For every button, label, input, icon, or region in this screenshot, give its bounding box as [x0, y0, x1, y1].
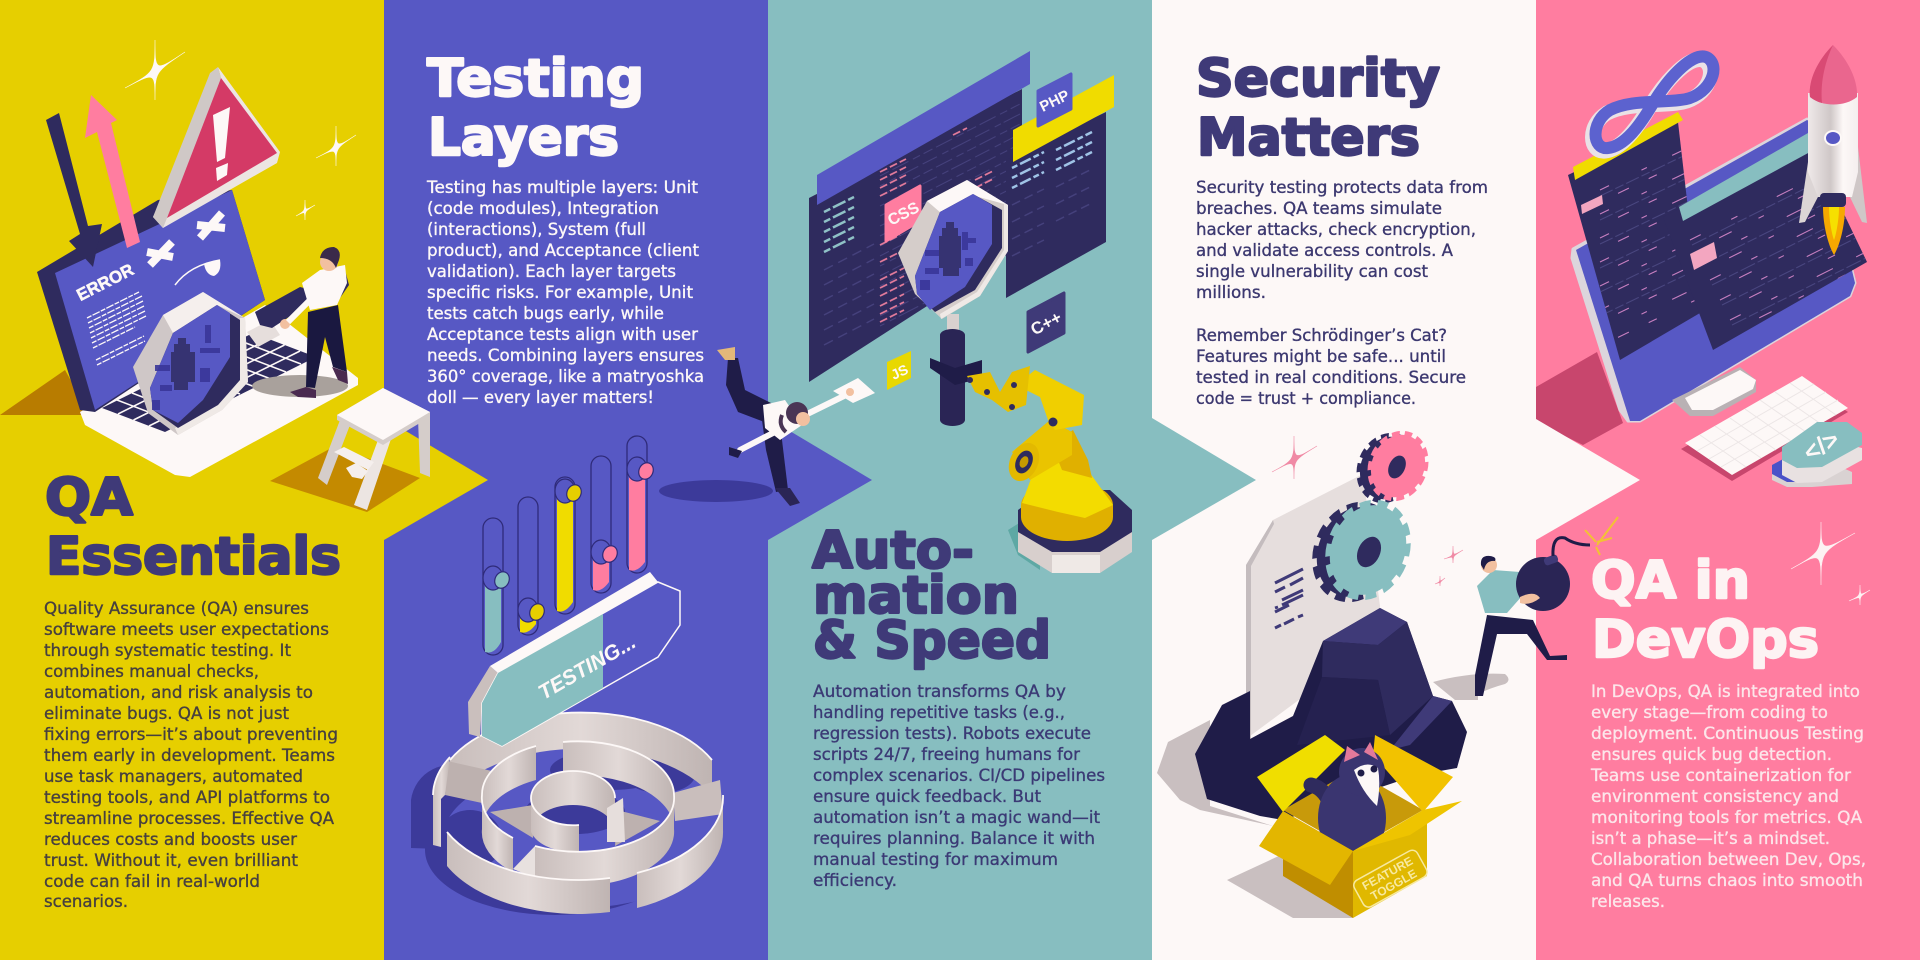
icon: keyboard	[1681, 376, 1848, 481]
badge: JS: JS	[888, 361, 911, 383]
icon: robot arm	[967, 366, 1132, 573]
icon: rocket	[1799, 45, 1867, 255]
panel: Automation and Speed	[768, 0, 1256, 960]
text: Testing body: Testing has multiple layers: Unit	[426, 178, 698, 198]
icon: person pushing magnifier	[252, 247, 349, 398]
icon: warning triangle	[153, 67, 280, 228]
heading: Automation and Speed: mation	[813, 566, 1019, 626]
code window left	[1568, 112, 1700, 360]
icon: sparkles	[125, 40, 356, 220]
icon: document card	[1246, 474, 1380, 739]
badge: CSS	[885, 186, 922, 241]
text: Testing body: (interactions), System (full	[427, 220, 646, 240]
text: Testing body: needs. Combining layers ensures	[427, 346, 704, 366]
text: QA Essentials body: eliminate bugs. QA is not just	[44, 704, 289, 724]
text: Automation body: efficiency.	[813, 871, 897, 891]
badge: PHP	[1037, 74, 1072, 126]
text: QA Essentials body: scenarios.	[44, 892, 128, 912]
text: Testing body: doll — every layer matters!	[427, 388, 654, 408]
text: QA Essentials body: Quality Assurance (QA) ensures	[44, 599, 309, 619]
slider 5	[627, 436, 656, 573]
slider 1	[483, 518, 512, 655]
text: QA Essentials body: streamline processes. Effective QA	[44, 809, 334, 829]
icon: woman delivering paper	[659, 347, 875, 506]
text: Security body: hacker attacks, check encryption,	[1196, 220, 1476, 240]
text: QA Essentials body: combines manual checks,	[44, 662, 259, 682]
panel: Security Matters	[1152, 0, 1640, 960]
arrow: purple pointer	[768, 418, 872, 540]
text: QA in DevOps body: Collaboration between Dev, Ops,	[1591, 850, 1866, 870]
text: QA in DevOps body: and QA turns chaos into smooth	[1591, 871, 1863, 891]
text: Automation body	[813, 682, 1105, 891]
heading: QA in DevOps: DevOps	[1592, 610, 1819, 670]
text: QA Essentials body: reduces costs and boosts user	[44, 830, 297, 850]
arrow: yellow pointer	[384, 418, 488, 540]
text: QA Essentials body: fixing errors—it’s about preventing	[44, 725, 338, 745]
badge: C++	[1028, 293, 1065, 352]
text: QA in DevOps body: Teams use containerization for	[1590, 766, 1851, 786]
text: Security body: and validate access controls. A	[1196, 241, 1453, 261]
text: QA Essentials body: trust. Without it, even brilliant	[44, 851, 298, 871]
badge: PHP: PHP	[1037, 87, 1072, 116]
text: Security body: single vulnerability can cost	[1196, 262, 1428, 282]
text: Testing body: product), and Acceptance (client	[427, 241, 699, 261]
heading: Automation and Speed: Auto-	[812, 521, 974, 581]
arrow: pink up	[85, 95, 140, 248]
icon: gears	[1301, 425, 1435, 611]
icon: box with cat: TOGGLE	[1368, 866, 1419, 903]
icon: cat	[1311, 742, 1386, 862]
icon: maze	[411, 713, 723, 915]
text: QA Essentials body: through systematic testing. It	[44, 641, 291, 661]
heading: Testing Layers: Layers	[428, 108, 619, 168]
text: Automation body: regression tests). Robots execute	[813, 724, 1091, 744]
text: QA in DevOps body: isn’t a phase—it’s a mindset.	[1591, 829, 1830, 849]
text: Testing body: Acceptance tests align with user	[427, 325, 698, 345]
icon: magnifier with bug	[133, 287, 315, 435]
heading: QA Essentials: Essentials	[46, 527, 341, 587]
text: QA Essentials body: testing tools, and API platforms to	[44, 788, 330, 808]
text: QA Essentials body: automation, and risk analysis to	[44, 683, 313, 703]
text: Security body: millions.	[1196, 283, 1266, 303]
text: Security body: Security testing protects data from	[1196, 178, 1488, 198]
slider 4	[591, 456, 620, 593]
icon: stool	[270, 388, 430, 512]
arrow: teal pointer	[1152, 418, 1256, 540]
text: QA in DevOps body: environment consistency and	[1591, 787, 1839, 807]
text: Automation body: Automation transforms QA by	[813, 682, 1066, 702]
text: Automation body: requires planning. Balance it with	[813, 829, 1095, 849]
text: QA in DevOps body: monitoring tools for metrics. QA	[1591, 808, 1862, 828]
text: QA in DevOps body: ensures quick bug detection.	[1591, 745, 1832, 765]
icon: rock	[1195, 608, 1467, 820]
heading: QA in DevOps	[1591, 551, 1819, 670]
heading: QA Essentials: QA	[45, 468, 133, 528]
code window main	[809, 51, 1030, 382]
icon: laptop: ERROR	[74, 260, 137, 305]
arrow: white pointer	[1536, 419, 1640, 540]
text: Automation body: manual testing for maximum	[813, 850, 1058, 870]
floor shadows	[1157, 674, 1508, 918]
heading: Automation and Speed: & Speed	[813, 611, 1051, 671]
text: QA Essentials body: them early in development. Teams	[44, 746, 335, 766]
badge: JS	[887, 351, 911, 390]
icon: testing progress bar	[468, 572, 680, 746]
text: Automation body: ensure quick feedback. But	[813, 787, 1041, 807]
arrow: navy down	[46, 113, 102, 267]
text: QA Essentials body: code can fail in real-world	[44, 872, 260, 892]
icon: code badge: </>	[1799, 425, 1844, 467]
icon: box with cat: FEATURE	[1360, 854, 1415, 893]
heading: Testing Layers: Testing	[427, 49, 644, 109]
text: Testing body: 360° coverage, like a matryoshka	[427, 367, 704, 387]
text: Testing body: tests catch bugs early, while	[427, 304, 664, 324]
heading: Automation and Speed	[812, 521, 1051, 671]
laptop shadow	[0, 370, 90, 415]
icon: man carrying bomb	[1475, 517, 1618, 696]
icon: testing progress bar: TESTING...	[535, 630, 640, 705]
text: Security body: Features might be safe... until	[1196, 347, 1446, 367]
heading: QA Essentials	[45, 468, 341, 587]
badge: C++: C++	[1028, 308, 1065, 339]
icon: laptop	[37, 190, 358, 477]
text: QA in DevOps body: releases.	[1591, 892, 1665, 912]
icon: magnifier with bug	[898, 180, 1008, 426]
heading: Security Matters: Security	[1196, 49, 1440, 109]
text: Automation body: automation isn’t a magic wand—it	[813, 808, 1100, 828]
text: Security body: tested in real conditions. Secure	[1196, 368, 1466, 388]
text: Security body	[1196, 178, 1488, 409]
panel: QA Essentials	[0, 0, 488, 960]
text: QA Essentials body	[44, 599, 338, 912]
heading: Security Matters: Matters	[1197, 108, 1420, 168]
panel: QA in DevOps	[1536, 0, 1920, 960]
code window secondary	[1006, 75, 1114, 298]
heading: QA in DevOps: QA in	[1591, 551, 1750, 611]
text: Automation body: complex scenarios. CI/CD pipelines	[813, 766, 1105, 786]
text: QA in DevOps body: In DevOps, QA is integrated into	[1591, 682, 1860, 702]
icon: box with cat	[1257, 735, 1462, 918]
text: Automation body: scripts 24/7, freeing humans for	[813, 745, 1080, 765]
icon: pink sparkles	[1272, 436, 1463, 586]
text: QA Essentials body: software meets user expectations	[44, 620, 329, 640]
heading: Security Matters	[1196, 49, 1440, 168]
text: Testing body	[426, 178, 704, 408]
icon: code badge	[1772, 422, 1862, 487]
panel: Testing Layers	[384, 0, 875, 960]
text: Testing body: specific risks. For example, Unit	[427, 283, 693, 303]
badge: CSS: CSS	[885, 199, 922, 229]
text: Security body: Remember Schrödinger’s Cat?	[1196, 326, 1447, 346]
chart: level sliders	[483, 436, 656, 655]
text: Testing body: (code modules), Integration	[427, 199, 659, 219]
heading: Testing Layers	[427, 49, 644, 168]
text: QA in DevOps body: every stage—from coding to	[1591, 703, 1828, 723]
text: QA in DevOps body: deployment. Continuous Testing	[1591, 724, 1864, 744]
monitor shadow	[1536, 352, 1623, 445]
icon: infinity loop	[1592, 56, 1713, 151]
text: QA in DevOps body	[1590, 682, 1866, 912]
text: Security body: code = trust + compliance.	[1196, 389, 1416, 409]
slider 2	[518, 497, 547, 635]
text: Testing body: validation). Each layer targets	[427, 262, 676, 282]
icon: monitor	[1572, 119, 1855, 421]
code window right	[1670, 133, 1867, 350]
text: Automation body: handling repetitive tasks (e.g.,	[813, 703, 1065, 723]
text: QA Essentials body: use task managers, automated	[44, 767, 303, 787]
icon: sparkles	[1791, 522, 1870, 605]
slider 3	[555, 477, 584, 614]
text: Security body: breaches. QA teams simulate	[1196, 199, 1442, 219]
